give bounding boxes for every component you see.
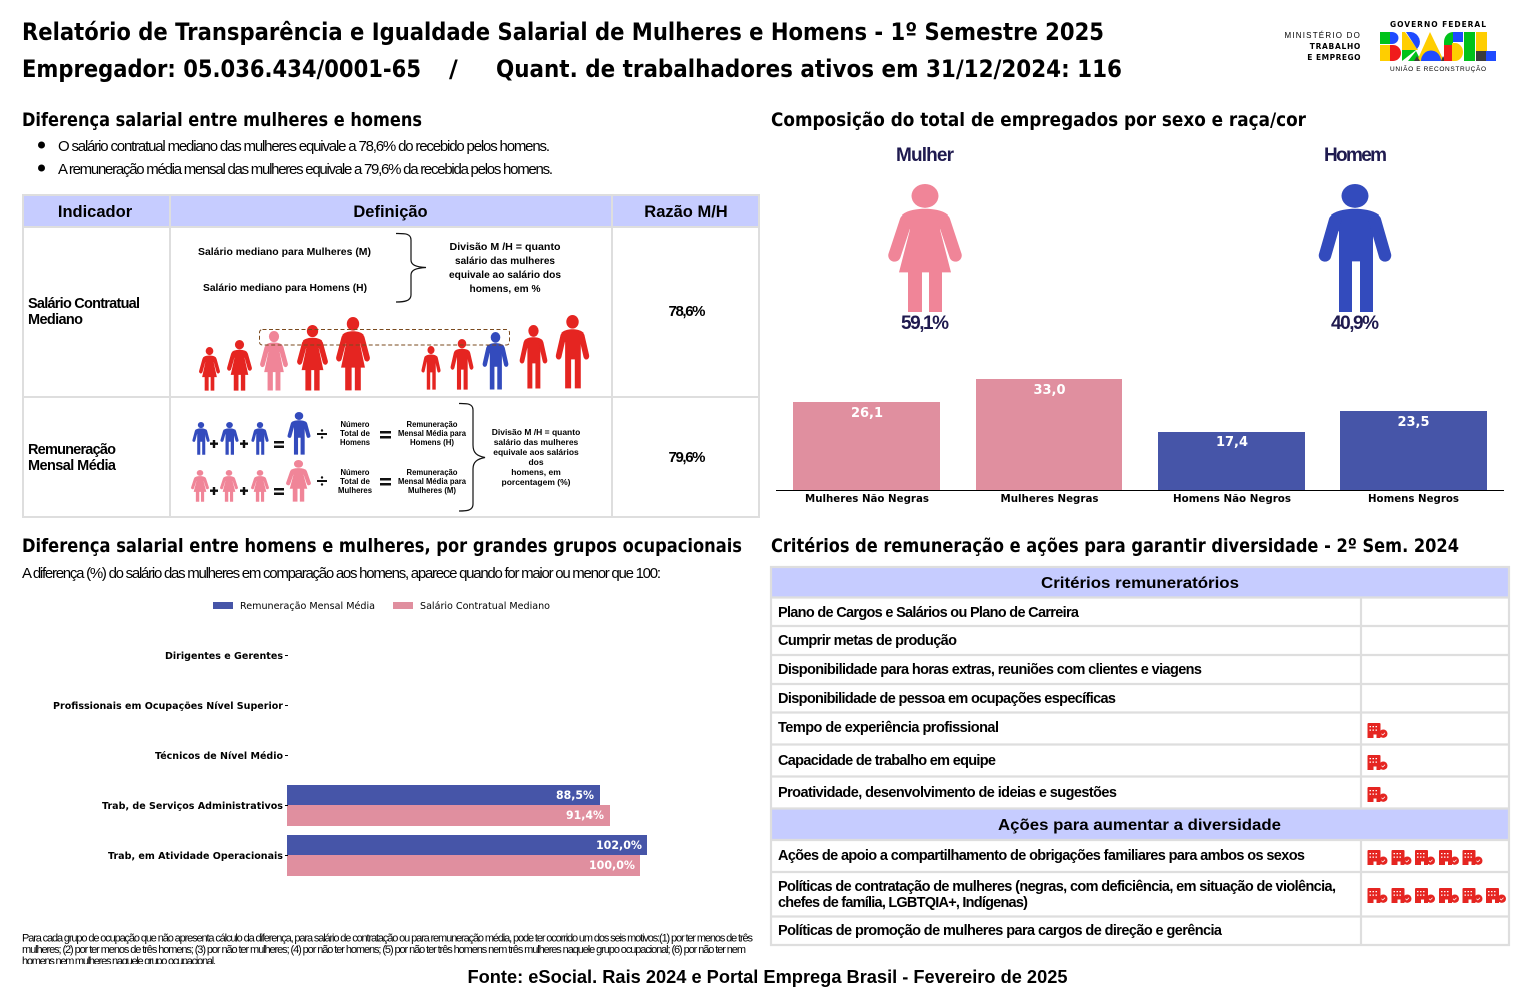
footnote: Para cada grupo de ocupação que não apresenta cálculo da diferença, para salário de contratação ou para remuneração média, pode ter ocorrido um dos seis motivos:(1) por ter menos de três	[22, 932, 754, 944]
table: indicadores: Definição	[353, 203, 428, 221]
panel: composição por sexo e raça	[771, 109, 1504, 505]
bar chart: sexo e raça: Mulheres Negras	[1000, 493, 1098, 505]
diagram: remuneração média: dos	[528, 457, 544, 467]
bar chart: sexo e raça: 26,1	[851, 406, 883, 421]
bar chart: ocupações	[53, 651, 647, 876]
table: indicadores: 78,6%	[668, 303, 706, 320]
diagram: remuneração média: Número	[340, 420, 370, 429]
figure: mulher: 59,1%	[901, 313, 949, 334]
table: critérios: Políticas de promoção de mulheres para cargos de direção e gerência	[778, 923, 1223, 939]
heading: Diferença salarial entre homens e mulheres, por grandes grupos ocupacionais	[22, 535, 742, 557]
panel: critérios e ações	[770, 535, 1510, 946]
footnote	[22, 932, 754, 968]
diagram: remuneração média: Mulheres (M)	[408, 486, 456, 495]
title: Relatório de Transparência e Igualdade Salarial de Mulheres e Homens - 1º Semestre 2025	[22, 18, 1104, 46]
bullet list: A remuneração média mensal das mulheres equivale a 79,6% da recebida pelos homens.	[58, 161, 553, 178]
diagram: remuneração média: Mensal Média para	[398, 477, 467, 486]
figure: homem: 40,9%	[1331, 313, 1379, 334]
icons: empresa com selo	[1368, 723, 1506, 903]
table: critérios: Políticas de contratação de mulheres (negras, com deficiência, em situação de violência,	[778, 879, 1336, 895]
figure: homem: Homem	[1324, 145, 1387, 166]
bar chart: sexo e raça: Homens Não Negros	[1173, 493, 1291, 505]
table: critérios: Capacidade de trabalho em equipe	[778, 753, 996, 769]
heading: Composição do total de empregados por sexo e raça/cor	[771, 109, 1307, 131]
diagram: salário mediano: salário das mulheres	[455, 255, 555, 267]
footnote: homens nem mulheres naquele grupo ocupacional.	[22, 956, 216, 968]
diagram: salário mediano: homens, em %	[470, 283, 541, 295]
bar chart: ocupações: Profissionais em Ocupações Nível Superior	[53, 701, 283, 712]
logo: governo federal brasil: UNIÃO E RECONSTRUÇÃO	[1390, 64, 1486, 73]
diagram: remuneração média: Total de	[340, 429, 371, 438]
panel: diferença salarial	[22, 109, 760, 518]
bar chart: ocupações: 88,5%	[556, 789, 594, 802]
logo: ministério do trabalho e emprego: TRABALHO	[1310, 42, 1361, 51]
legend	[213, 601, 550, 612]
table: critérios: Plano de Cargos e Salários ou Plano de Carreira	[778, 605, 1080, 621]
table: critérios: Cumprir metas de produção	[778, 633, 957, 649]
diagram: salário mediano: Salário mediano para Homens (H)	[203, 282, 367, 294]
bar chart: ocupações: Técnicos de Nível Médio	[155, 751, 283, 762]
diagram: remuneração média: salário das mulheres	[494, 437, 579, 447]
diagram: remuneração média	[193, 403, 580, 511]
bar chart: ocupações: Trab, de Serviços Administrativos	[102, 801, 283, 812]
bullet list	[38, 138, 553, 178]
bar chart: sexo e raça: Mulheres Não Negras	[805, 493, 929, 505]
heading: Diferença salarial entre mulheres e homens	[22, 109, 422, 131]
bar chart: sexo e raça	[776, 379, 1504, 505]
diagram: salário mediano	[198, 233, 586, 391]
title	[22, 18, 1122, 83]
title: /	[449, 55, 458, 83]
figure: mulher	[894, 145, 956, 334]
table: critérios: Proatividade, desenvolvimento de ideias e sugestões	[778, 785, 1117, 801]
table: indicadores	[22, 194, 760, 518]
logo: ministério do trabalho e emprego	[1284, 31, 1361, 62]
table: critérios: Tempo de experiência profissional	[778, 720, 999, 736]
legend: Salário Contratual Mediano	[420, 601, 550, 612]
table: critérios: Disponibilidade de pessoa em ocupações específicas	[778, 691, 1116, 707]
bar chart: ocupações: Dirigentes e Gerentes	[165, 651, 283, 662]
logo: ministério do trabalho e emprego: MINISTÉRIO DO	[1284, 31, 1361, 40]
diagram: remuneração média: porcentagem (%)	[502, 477, 571, 487]
panel: grupos ocupacionais	[22, 535, 754, 968]
diagram: remuneração média: Homens	[340, 438, 371, 447]
table: indicadores: Salário Contratual	[28, 296, 140, 312]
table: critérios: Ações de apoio a compartilhamento de obrigações familiares para ambos os sexos	[778, 848, 1305, 864]
table: critérios: Critérios remuneratórios	[1041, 575, 1239, 592]
bar chart: ocupações: 91,4%	[566, 809, 604, 822]
figure: mulher: Mulher	[896, 145, 955, 166]
diagram: remuneração média: Remuneração	[406, 420, 458, 429]
bar chart: sexo e raça: Homens Negros	[1368, 493, 1459, 505]
bar chart: sexo e raça: 33,0	[1033, 383, 1066, 398]
footnote: mulheres; (2) por ter menos de três homens; (3) por não ter mulheres; (4) por não ter homens; (5) por não ter três homens nem três mulheres naquele grupo ocupacional; (6) por não ter nem	[22, 944, 746, 956]
figure: homem	[1324, 145, 1387, 334]
logo: ministério do trabalho e emprego: E EMPREGO	[1307, 53, 1361, 62]
table: indicadores: Mensal Média	[28, 458, 117, 474]
diagram: remuneração média: Mulheres	[338, 486, 373, 495]
diagram: remuneração média: Número	[340, 468, 370, 477]
diagram: remuneração média: homens, em	[511, 467, 561, 477]
bar chart: ocupações: Trab, em Atividade Operacionais	[108, 851, 283, 862]
subtitle: A diferença (%) do salário das mulheres em comparação aos homens, aparece quando for maior ou menor que 100:	[22, 565, 661, 582]
diagram: remuneração média: Divisão M /H = quanto	[492, 427, 580, 437]
diagram: salário mediano: equivale ao salário dos	[449, 269, 561, 281]
diagram: salário mediano: Salário mediano para Mulheres (M)	[198, 246, 371, 258]
table: critérios: Disponibilidade para horas extras, reuniões com clientes e viagens	[778, 662, 1202, 678]
bullet list: O salário contratual mediano das mulheres equivale a 78,6% do recebido pelos homens.	[58, 138, 550, 155]
diagram: remuneração média: Mensal Média para	[398, 429, 467, 438]
diagram: remuneração média: Total de	[340, 477, 371, 486]
diagram: remuneração média: Homens (H)	[410, 438, 454, 447]
table: critérios: chefes de família, LGBTQIA+, Indígenas)	[778, 895, 1028, 911]
table: critérios: Ações para aumentar a diversidade	[998, 817, 1281, 834]
legend: Remuneração Mensal Média	[240, 601, 375, 612]
source line: Fonte: eSocial. Rais 2024 e Portal Emprega Brasil - Fevereiro de 2025	[468, 966, 1068, 987]
table: indicadores: 79,6%	[668, 449, 706, 466]
title: Quant. de trabalhadores ativos em 31/12/2024: 116	[496, 55, 1122, 83]
title: Empregador: 05.036.434/0001-65	[22, 55, 421, 83]
bar chart: ocupações: 100,0%	[589, 859, 635, 872]
logo: governo federal brasil	[1380, 20, 1496, 73]
diagram: salário mediano: Divisão M /H = quanto	[450, 241, 560, 253]
bar chart: sexo e raça: 17,4	[1216, 435, 1248, 450]
table: indicadores: Razão M/H	[644, 203, 728, 221]
bar chart: ocupações: 102,0%	[596, 839, 642, 852]
table: indicadores: Indicador	[58, 203, 133, 221]
table: indicadores: Remuneração	[28, 442, 116, 458]
table: indicadores: Mediano	[28, 312, 83, 328]
bar chart: sexo e raça: 23,5	[1397, 415, 1430, 430]
diagram: remuneração média: equivale aos salários	[493, 447, 579, 457]
diagram: remuneração média: Remuneração	[406, 468, 458, 477]
logo: governo federal brasil: GOVERNO FEDERAL	[1390, 20, 1486, 29]
table: critérios	[770, 566, 1510, 946]
